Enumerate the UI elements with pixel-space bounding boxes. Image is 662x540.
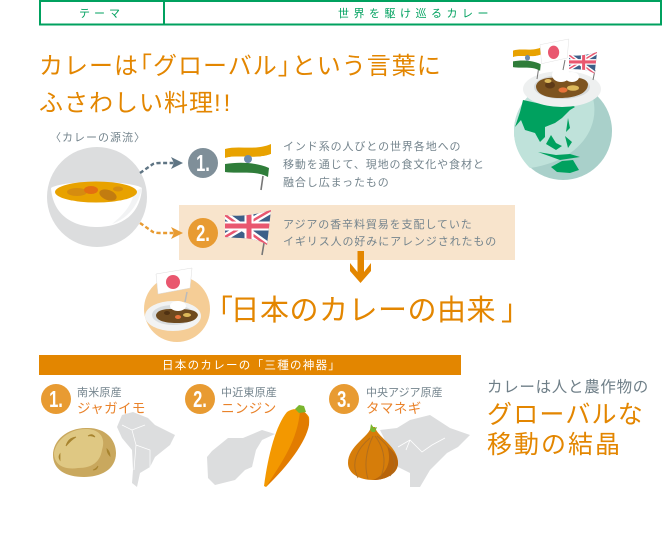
map: South America: [117, 412, 175, 487]
ingredient 3: onion: [329, 384, 470, 487]
number badge 3: 3.: [337, 387, 351, 413]
icon: curry bowl: [47, 147, 147, 247]
arrow: down to Japan: [350, 251, 371, 283]
conclusion text: [487, 378, 649, 459]
label: Middle East: 中近東原産: [221, 385, 277, 399]
label: potato: ジャガイモ: [77, 401, 146, 416]
panel: origin 2 Britain: [179, 205, 515, 260]
ingredient 1: potato: [41, 384, 175, 487]
illustration: onion: [348, 424, 398, 480]
illustration: carrot: [264, 405, 309, 487]
icon: Japanese curry: [144, 268, 210, 342]
number badge 2: 2.: [196, 221, 210, 247]
illustration: globe with curry and flags: [513, 39, 612, 180]
number badge 3: [329, 384, 359, 414]
header label: theme: テーマ: [79, 8, 124, 20]
flags: [537, 60, 595, 80]
banner: three sacred treasures: [39, 355, 461, 375]
text: India explanation: 移動を通じて、現地の食文化や食材と: [283, 157, 485, 171]
text: Britain explanation: イギリス人の好みにアレンジされたもの: [283, 234, 497, 248]
text: India explanation: インド系の人びとの世界各地への: [283, 139, 461, 153]
ingredient 2: carrot: [185, 384, 309, 487]
map: Central Asia: [380, 415, 470, 487]
conclusion text: グローバルな: [487, 401, 644, 429]
map: Afghanistan: [207, 430, 275, 485]
text: Britain explanation: アジアの香辛料貿易を支配していた: [283, 217, 473, 231]
label: South America: 南米原産: [77, 385, 122, 399]
number badge 2: 2.: [193, 387, 207, 413]
main heading: カレーは「グローバル」という言葉に: [39, 53, 442, 80]
header bar: [40, 1, 661, 25]
text: India explanation: [283, 139, 485, 189]
number badge 2: [188, 218, 218, 248]
number badge 1: 1.: [49, 387, 63, 413]
icon: Indian flag: [225, 144, 271, 190]
label: carrot: ニンジン: [221, 401, 277, 416]
main heading: [39, 53, 442, 117]
main heading: ふさわしい料理!!: [39, 90, 233, 117]
number badge 1: 1.: [196, 151, 210, 177]
label: source of curry: 〈カレーの源流〉: [50, 130, 146, 144]
header title: 世界を駆け巡るカレー: [338, 7, 493, 20]
arrow: bowl to India: [140, 157, 183, 173]
banner: three sacred treasures: 日本のカレーの「三種の神器」: [162, 358, 341, 372]
text: Britain explanation: [283, 217, 497, 248]
label: Central Asia: 中央アジア原産: [366, 385, 443, 399]
text: India explanation: 融合し広まったもの: [283, 176, 390, 189]
number badge 1: [188, 148, 218, 178]
plate: [523, 71, 601, 107]
conclusion text: カレーは人と農作物の: [487, 378, 649, 396]
conclusion text: 移動の結晶: [487, 431, 622, 459]
continents: [515, 100, 575, 142]
heading: origin of Japanese curry: 「日本のカレーの由来」: [204, 294, 531, 327]
illustration: potato: [53, 428, 116, 477]
arrow: bowl to Britain: [140, 223, 183, 239]
icon: British flag: [223, 208, 273, 255]
label: onion: タマネギ: [366, 401, 422, 416]
origin 1: India: [188, 139, 485, 190]
